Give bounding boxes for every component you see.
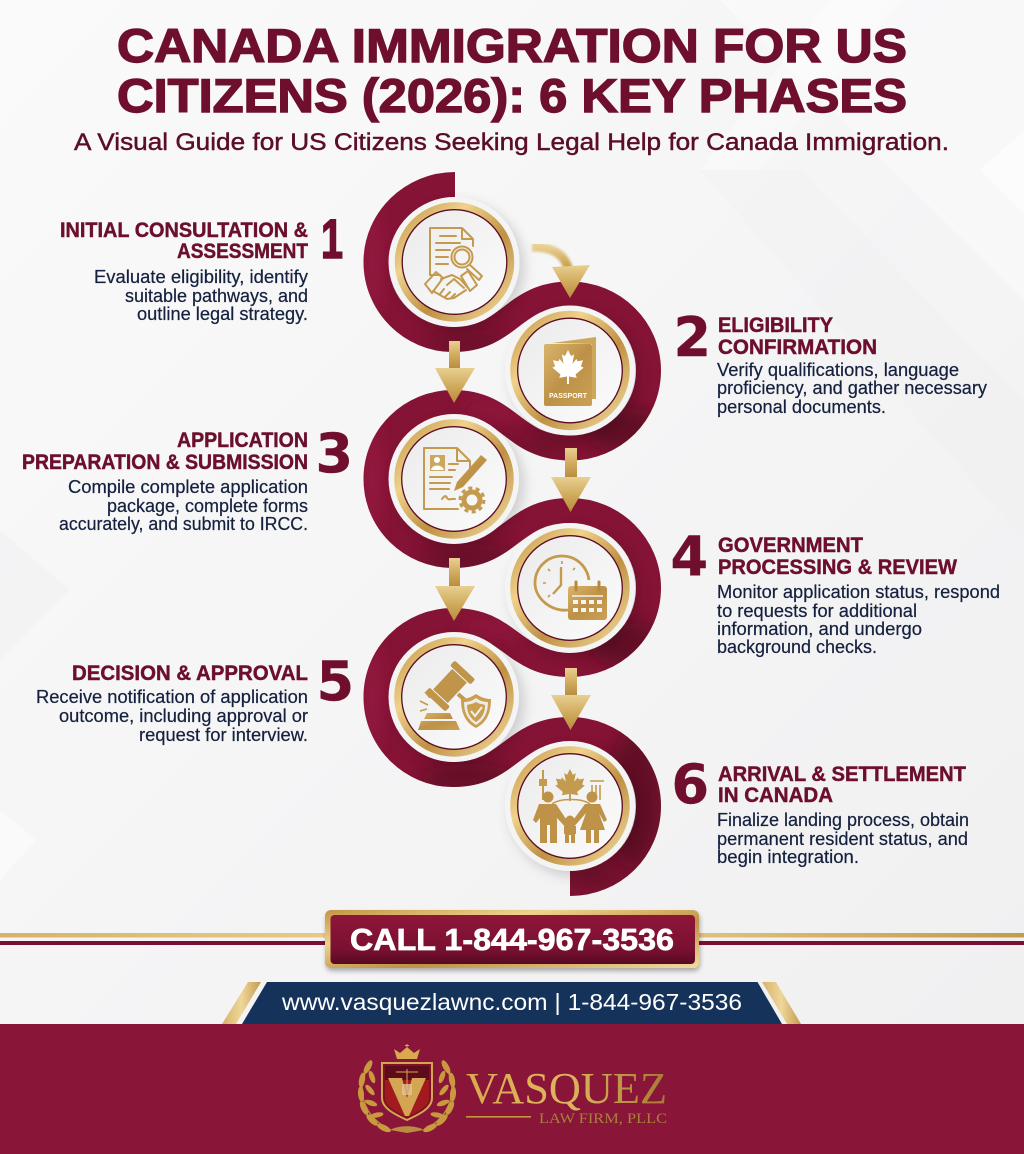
panel: phase 4	[670, 525, 1000, 657]
panel: phase 3	[22, 422, 353, 534]
phase 4 heading: GOVERNMENT	[718, 534, 863, 557]
phase 4 description: to requests for additional	[717, 601, 917, 621]
phase 1 heading: INITIAL CONSULTATION &	[60, 219, 308, 242]
phase 1 heading: ASSESSMENT	[177, 240, 308, 263]
logo wordmark: LAW FIRM, PLLC	[539, 1111, 667, 1127]
phase 3 heading	[22, 429, 308, 474]
panel: phase 2	[674, 306, 987, 417]
phase number 5: 5	[316, 650, 354, 713]
phase 3 description	[59, 477, 308, 534]
phase 1 description: suitable pathways, and	[125, 286, 308, 306]
medal: phase 1	[390, 197, 520, 327]
subtitle: A Visual Guide for US Citizens Seeking Legal Help for Canada Immigration.	[74, 129, 949, 156]
phase 5 description: outcome, including approval or	[59, 706, 308, 726]
icon: passport	[544, 337, 596, 406]
phase number 1: 1	[321, 207, 343, 270]
phase 1 description: outline legal strategy.	[137, 304, 308, 324]
phase number 2: 2	[674, 306, 711, 369]
icon: family, maple leaf and landmarks	[533, 769, 607, 843]
phase 1 heading	[60, 219, 308, 263]
phase number 4: 4	[670, 525, 708, 588]
footer band	[0, 1024, 1024, 1154]
phase 3 heading: PREPARATION & SUBMISSION	[22, 451, 308, 474]
phase 6 description: begin integration.	[717, 847, 859, 867]
phase 3 description: Compile complete application	[68, 477, 308, 497]
phase 4 heading	[718, 534, 957, 579]
phase 2 heading: CONFIRMATION	[718, 336, 877, 359]
phase number 6: 6	[672, 753, 709, 816]
icon: document, magnifier and handshake	[425, 228, 482, 299]
call button with side rules: CALL 1-844-967-3536	[350, 922, 674, 957]
panel: phase 1	[60, 207, 343, 324]
phase 2 description: Verify qualifications, language	[717, 360, 959, 380]
phase 5 description	[36, 687, 308, 745]
phase 4 description: background checks.	[717, 637, 877, 657]
panel: phase 6	[672, 753, 969, 867]
medal: phase 2	[505, 306, 635, 436]
phase 6 description: Finalize landing process, obtain	[717, 810, 969, 830]
phase 6 heading: IN CANADA	[718, 784, 833, 807]
logo: Vasquez Law Firm	[357, 1044, 667, 1134]
medal: phase 5	[389, 632, 519, 762]
arrow: curved, phase 1 to 2	[532, 247, 590, 298]
call button with side rules	[0, 910, 1024, 968]
logo wordmark: VASQUEZ	[466, 1064, 667, 1113]
phase 2 heading	[718, 314, 877, 359]
icon: form, pen and gear	[424, 448, 487, 512]
icon: passport: PASSPORT	[549, 393, 588, 400]
phase 6 description: permanent resident status, and	[717, 829, 968, 849]
panel: phase 5	[36, 650, 354, 745]
icon: gavel and shield	[418, 660, 491, 730]
title: CANADA IMMIGRATION FOR US	[117, 19, 907, 72]
phase 6 heading	[718, 763, 966, 807]
contact banner: www.vasquezlawnc.com | 1-844-967-3536	[281, 989, 742, 1015]
phase 3 description: package, complete forms	[107, 496, 308, 516]
phase 1 description: Evaluate eligibility, identify	[94, 267, 308, 287]
phase 5 description: request for interview.	[139, 725, 308, 745]
phase 5 description: Receive notification of application	[36, 687, 308, 707]
phase 2 heading: ELIGIBILITY	[718, 314, 833, 337]
logo crest	[357, 1044, 457, 1134]
ribbon	[362, 184, 670, 896]
title	[117, 19, 907, 122]
icon: clock and calendar	[535, 556, 607, 620]
arrow: down, phase 4 to 6	[551, 668, 591, 730]
phase 3 heading: APPLICATION	[177, 429, 308, 452]
contact banner	[222, 982, 801, 1024]
phase 3 description: accurately, and submit to IRCC.	[59, 514, 308, 534]
phase 2 description: personal documents.	[717, 397, 886, 417]
medal: phase 6	[505, 741, 635, 871]
phase 4 description	[717, 582, 1000, 657]
title: CITIZENS (2026): 6 KEY PHASES	[117, 69, 907, 122]
arrow: down, phase 3 to 5	[435, 558, 475, 621]
phase 6 heading: ARRIVAL & SETTLEMENT	[718, 763, 966, 786]
phase 2 description: proficiency, and gather necessary	[717, 378, 987, 398]
medal: phase 3	[389, 414, 519, 544]
arrow: down, phase 2 to 4	[551, 448, 591, 512]
phase 2 description	[717, 360, 987, 417]
phase 4 description: information, and undergo	[717, 619, 922, 639]
phase 1 description	[94, 267, 308, 324]
phase 5 heading: DECISION & APPROVAL	[72, 662, 308, 685]
phase 4 heading: PROCESSING & REVIEW	[718, 556, 957, 579]
phase 4 description: Monitor application status, respond	[717, 582, 1000, 602]
arrow: down, phase 1 to 3	[435, 341, 475, 403]
phase number 3: 3	[316, 422, 353, 485]
medal: phase 4	[505, 523, 635, 653]
phase 6 description	[717, 810, 969, 867]
